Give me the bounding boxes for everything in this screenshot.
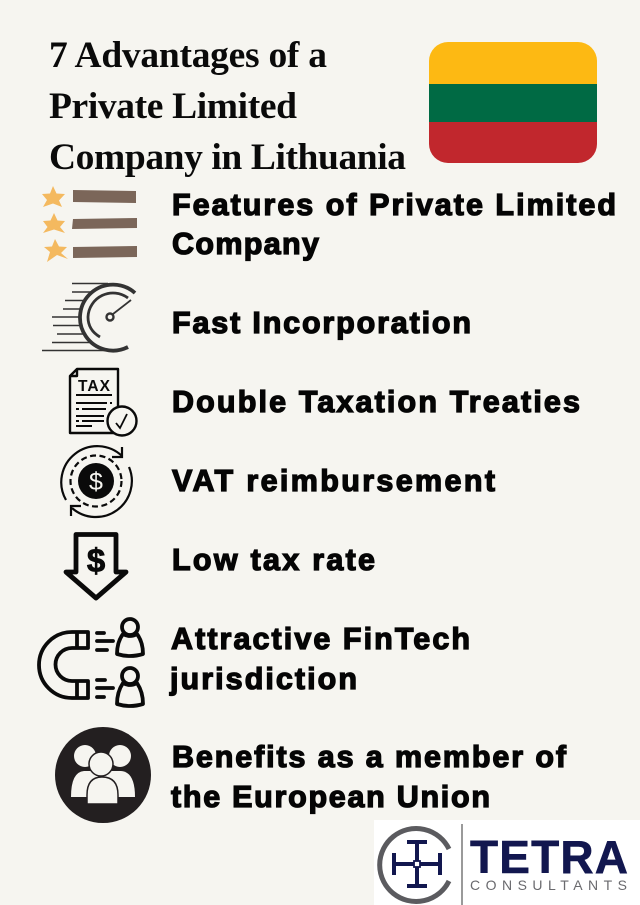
heading: Fast Incorporation: Fast Incorporation — [172, 306, 471, 340]
icon: speedometer — [42, 284, 135, 351]
title: Company in Lithuania — [49, 137, 406, 178]
icon: stars and bars — [42, 186, 137, 262]
icon: tax document: TAX — [78, 378, 111, 395]
heading: Attractive FinTech jurisdiction: Attractive FinTech — [171, 622, 470, 656]
logo: Tetra Consultants — [374, 820, 640, 905]
heading: Attractive FinTech jurisdiction — [169, 622, 470, 696]
title: 7 Advantages of a — [49, 35, 327, 76]
icon: down arrow with dollar — [66, 534, 126, 598]
heading: Benefits as a member of the European Union: Benefits as a member of — [172, 740, 567, 774]
icon: down arrow with dollar: $ — [87, 542, 105, 579]
logo: Tetra Consultants: TETRA — [470, 831, 628, 883]
icon: magnet attracting people — [39, 619, 143, 706]
heading: Low tax rate: Low tax rate — [172, 543, 375, 577]
heading: Attractive FinTech jurisdiction: jurisdiction — [169, 662, 357, 696]
heading: Double Taxation Treaties: Double Taxation Treaties — [172, 385, 580, 419]
logo: Tetra Consultants: CONSULTANTS — [470, 877, 627, 893]
heading: Benefits as a member of the European Union: the European Union — [171, 780, 490, 814]
icon: VAT refund coin — [61, 446, 132, 517]
icon: Lithuanian flag — [429, 42, 597, 163]
heading: Features of Private Limited Company: Features of Private Limited — [172, 188, 616, 222]
icon: VAT refund coin: $ — [89, 468, 103, 496]
icon: tax document — [70, 369, 136, 436]
title: Private Limited — [49, 86, 297, 127]
icon: group of people — [55, 727, 151, 823]
heading: Features of Private Limited Company: Company — [172, 227, 319, 261]
heading: Benefits as a member of the European Union — [171, 740, 567, 814]
heading: Features of Private Limited Company — [172, 188, 616, 261]
title — [49, 35, 406, 178]
heading: VAT reimbursement: VAT reimbursement — [172, 464, 495, 498]
